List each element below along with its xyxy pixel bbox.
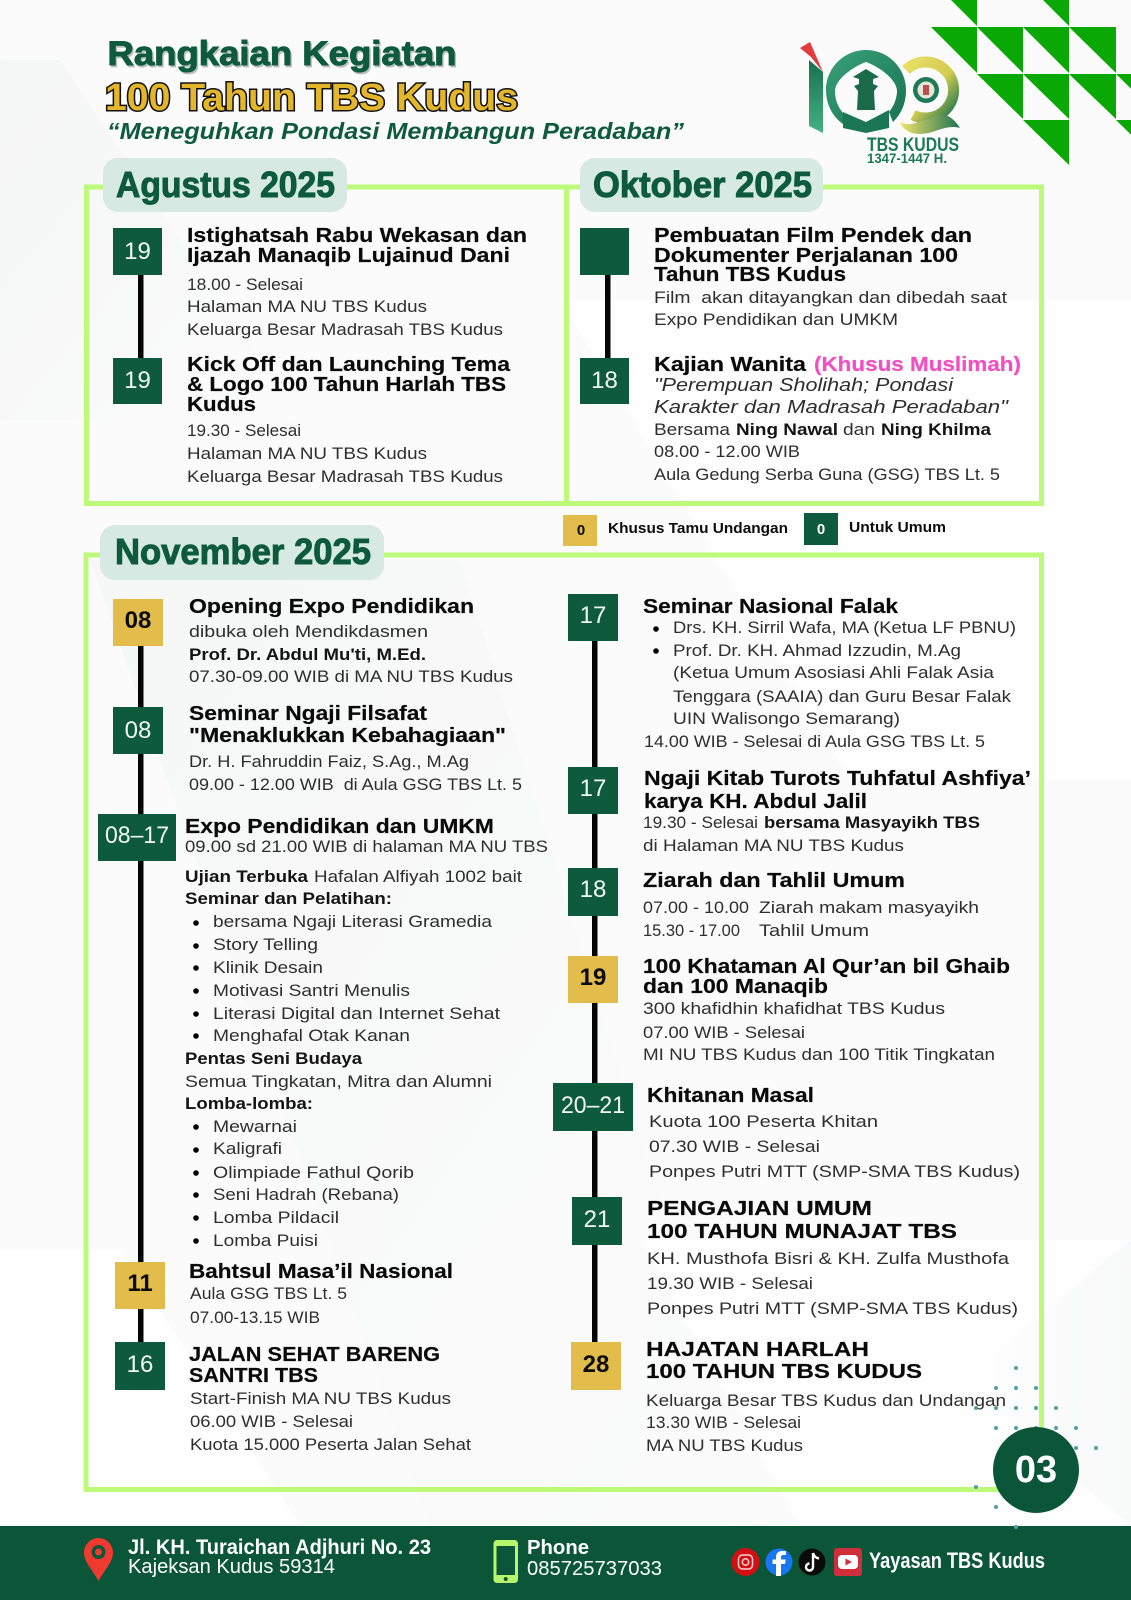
legend: invitation only: Khusus Tamu Undangan	[608, 521, 788, 537]
panel frame	[566, 187, 1042, 504]
event: Bahtsul Masa'il: 07.00-13.15 WIB	[190, 1308, 320, 1327]
event: Expo Pendidikan dan UMKM: Hafalan Alfiyah 1002 bait	[314, 867, 522, 886]
event: Hajatan Harlah: 100 TAHUN TBS KUDUS	[646, 1360, 922, 1383]
date box 21: 21	[584, 1206, 610, 1233]
event: Kajian Wanita: Aula Gedung Serba Guna (GSG) TBS Lt. 5	[654, 465, 1000, 484]
month pill: Oktober 2025	[593, 164, 812, 205]
timeline line	[138, 275, 144, 358]
event: Kajian Wanita: "Perempuan Sholihah; Pondasi	[654, 375, 954, 395]
legend: invitation only: 0	[577, 522, 585, 539]
event: Pembuatan Film: Expo Pendidikan dan UMKM	[654, 310, 898, 329]
event: Seminar Nasional Falak	[643, 595, 1016, 751]
date box 19 second: 19	[124, 367, 151, 394]
logo arch	[826, 50, 906, 124]
event: Seminar Ngaji Filsafat: "Menaklukkan Kebahagiaan"	[189, 724, 506, 747]
date box 18	[580, 358, 629, 404]
tagline: “Meneguhkan Pondasi Membangun Peradaban”	[107, 118, 685, 144]
title block	[105, 35, 685, 144]
date box 28	[571, 1342, 621, 1390]
event: Istighatsah: Ijazah Manaqib Lujainud Dani	[187, 244, 510, 267]
date box 18: 18	[580, 876, 606, 903]
event: Jalan Sehat: SANTRI TBS	[189, 1364, 318, 1387]
footer bar	[0, 1526, 1131, 1600]
event: Khataman: 300 khafidhin khafidhat TBS Kudus	[643, 999, 945, 1018]
event: Kick Off: Keluarga Besar Madrasah TBS Kudus	[187, 467, 503, 486]
event: Expo Pendidikan dan UMKM: Seminar dan Pelatihan:	[185, 889, 392, 908]
logo gold ring	[906, 62, 954, 118]
logo book	[843, 110, 889, 133]
list: lomba: Lomba Puisi	[213, 1231, 318, 1250]
event: Ngaji Kitab	[643, 767, 1031, 855]
event: Hajatan Harlah: Keluarga Besar TBS Kudus dan Undangan	[646, 1391, 1006, 1410]
event: Expo Pendidikan dan UMKM: Ujian Terbuka	[185, 867, 309, 886]
event: Khataman: 07.00 WIB - Selesai	[643, 1023, 805, 1042]
date box 19: 19	[124, 238, 151, 265]
footer phone: 085725737033	[527, 1558, 662, 1580]
date box 19	[113, 228, 162, 275]
event: Opening Expo	[189, 595, 513, 686]
list: lomba: Seni Hadrah (Rebana)	[213, 1185, 399, 1204]
legend: public: 0	[817, 521, 825, 538]
event: Kajian Wanita: Kajian Wanita	[654, 353, 807, 376]
footer address	[84, 1536, 431, 1581]
event: Ngaji Kitab: Ngaji Kitab Turots Tuhfatul Ashfiya’	[644, 767, 1031, 790]
list: seminar: Klinik Desain	[213, 958, 323, 977]
date box 28: 28	[583, 1351, 609, 1378]
date box 21	[572, 1197, 622, 1245]
event: Kick Off: Kudus	[187, 393, 256, 416]
event: Seminar Nasional Falak: Drs. KH. Sirril Wafa, MA (Ketua LF PBNU)	[673, 618, 1016, 637]
event: Bahtsul Masa'il: Aula GSG TBS Lt. 5	[190, 1284, 347, 1303]
month pill: November 2025	[115, 531, 371, 572]
event: Kajian Wanita	[654, 353, 1021, 484]
event: Ngaji Kitab: bersama Masyayikh TBS	[764, 813, 980, 832]
heading: Rangkaian Kegiatan: Rangkaian Kegiatan	[108, 35, 457, 73]
event: Kajian Wanita: (Khusus Muslimah)	[814, 353, 1021, 376]
list: lomba: Lomba Pildacil	[213, 1208, 339, 1227]
event: Bahtsul Masa'il	[189, 1260, 453, 1327]
event: Khitanan Masal: Khitanan Masal	[647, 1084, 814, 1107]
event: Pengajian Umum: KH. Musthofa Bisri & KH. Zulfa Musthofa	[647, 1249, 1010, 1268]
left timeline line	[138, 646, 144, 1342]
event: Pengajian Umum: Ponpes Putri MTT (SMP-SMA TBS Kudus)	[647, 1299, 1018, 1318]
logo numeral one	[809, 60, 823, 133]
list: seminar	[193, 912, 500, 1045]
event: Hajatan Harlah: MA NU TBS Kudus	[646, 1436, 803, 1455]
logo tower	[853, 69, 879, 110]
event: Expo Pendidikan dan UMKM: Pentas Seni Budaya	[185, 1049, 363, 1068]
legend	[563, 513, 946, 546]
event: Pengajian Umum: 19.30 WIB - Selesai	[647, 1274, 813, 1293]
event: Jalan Sehat: JALAN SEHAT BARENG	[189, 1343, 440, 1366]
event: Pembuatan Film: Film akan ditayangkan dan dibedah saat	[654, 288, 1007, 307]
event: Jalan Sehat: 06.00 WIB - Selesai	[190, 1412, 353, 1431]
event: Hajatan Harlah: 13.30 WIB - Selesai	[646, 1413, 801, 1432]
logo emblem	[913, 77, 939, 103]
footer phone	[494, 1537, 662, 1583]
event: Istighatsah: Istighatsah Rabu Wekasan dan	[187, 224, 527, 247]
heading: Rangkaian Kegiatan: Rangkaian Kegiatan	[109, 37, 458, 75]
date box 19 gold: 19	[580, 964, 606, 991]
event: Khataman	[643, 955, 1010, 1064]
event: Bahtsul Masa'il: Bahtsul Masa’il Nasional	[189, 1260, 453, 1283]
month pill	[100, 525, 384, 580]
event: Hajatan Harlah	[646, 1338, 1006, 1455]
logo swoosh	[900, 115, 960, 134]
date box 16	[115, 1342, 165, 1390]
right timeline line	[592, 641, 598, 1342]
event: Istighatsah: Halaman MA NU TBS Kudus	[187, 297, 427, 316]
event: Seminar Nasional Falak: Tenggara (SAAIA) dan Guru Besar Falak	[673, 687, 1012, 706]
event: Pembuatan Film: Tahun TBS Kudus	[654, 263, 846, 286]
event: Kick Off: & Logo 100 Tahun Harlah TBS	[187, 373, 506, 396]
date box 17: 17	[580, 602, 606, 629]
event: Opening Expo: 07.30-09.00 WIB di MA NU TBS Kudus	[189, 667, 513, 686]
event: Expo Pendidikan dan UMKM: Expo Pendidikan dan UMKM	[185, 815, 494, 838]
event: Pengajian Umum	[647, 1197, 1018, 1318]
footer phone: Phone	[527, 1537, 589, 1559]
heading: 100 Tahun TBS Kudus: 100 Tahun TBS Kudus	[105, 77, 518, 119]
event: Pengajian Umum: 100 TAHUN MUNAJAT TBS	[647, 1220, 957, 1243]
logo wordmark: TBS KUDUS	[867, 135, 959, 156]
panel frame	[86, 187, 566, 504]
event: Seminar Ngaji Filsafat: Dr. H. Fahruddin Faiz, S.Ag., M.Ag	[189, 752, 469, 771]
event: Kick Off	[187, 353, 511, 486]
event: Khataman: 100 Khataman Al Qur’an bil Ghaib	[643, 955, 1010, 978]
panel: November 2025	[86, 525, 1042, 1490]
event: Opening Expo: dibuka oleh Mendikdasmen	[189, 622, 428, 641]
footer social: Yayasan TBS Kudus	[869, 1548, 1045, 1573]
logo years: 1347-1447 H.	[867, 151, 947, 166]
event: Khataman: MI NU TBS Kudus dan 100 Titik Tingkatan	[643, 1045, 995, 1064]
legend: public	[804, 513, 946, 545]
timeline line	[605, 275, 610, 358]
event: Ziarah: Ziarah makam masyayikh	[759, 898, 979, 917]
event: Ngaji Kitab: 19.30 - Selesai	[643, 813, 758, 832]
date box 08 gold: 08	[125, 607, 151, 634]
event: Pembuatan Film: Dokumenter Perjalanan 100	[654, 244, 958, 267]
icon: youtube	[834, 1548, 862, 1576]
list: lomba: Kaligrafi	[213, 1139, 282, 1158]
event: Kajian Wanita: Bersama	[654, 420, 731, 439]
list: seminar: Motivasi Santri Menulis	[213, 981, 410, 1000]
event: Istighatsah: 18.00 - Selesai	[187, 275, 303, 294]
date box 19 second	[113, 358, 162, 404]
event: Expo Pendidikan dan UMKM: Lomba-lomba:	[185, 1094, 313, 1113]
event: Expo Pendidikan dan UMKM	[185, 815, 548, 1250]
list: lomba: Mewarnai	[213, 1117, 297, 1136]
event: Seminar Nasional Falak: Seminar Nasional Falak	[643, 595, 899, 618]
event: Seminar Nasional Falak: Prof. Dr. KH. Ahmad Izzudin, M.Ag	[673, 641, 961, 660]
event: Kajian Wanita: 08.00 - 12.00 WIB	[654, 442, 800, 461]
date box 18	[568, 868, 618, 916]
event: Istighatsah: Keluarga Besar Madrasah TBS Kudus	[187, 320, 503, 339]
page number badge: 03	[1015, 1449, 1057, 1491]
event: Ziarah: 15.30 - 17.00	[643, 921, 740, 940]
panel frame	[86, 555, 1042, 1490]
page number badge	[993, 1427, 1079, 1513]
list: lomba: Olimpiade Fathul Qorib	[213, 1163, 414, 1182]
date box 17 second: 17	[580, 775, 606, 802]
event: Khitanan Masal: Ponpes Putri MTT (SMP-SMA TBS Kudus)	[649, 1162, 1020, 1181]
event: Jalan Sehat: Kuota 15.000 Peserta Jalan Sehat	[190, 1435, 471, 1454]
event: Kajian Wanita: dan	[843, 420, 875, 439]
list: seminar: Menghafal Otak Kanan	[213, 1026, 410, 1045]
date box 08 gold	[113, 599, 163, 646]
footer social	[732, 1548, 1045, 1576]
event: Seminar Nasional Falak: UIN Walisongo Semarang)	[673, 709, 900, 728]
event: Opening Expo: Opening Expo Pendidikan	[189, 595, 474, 618]
event: Seminar Ngaji Filsafat: Seminar Ngaji Filsafat	[189, 702, 427, 725]
event: Kick Off: Kick Off dan Launching Tema	[187, 353, 511, 376]
event: Pembuatan Film: Pembuatan Film Pendek dan	[654, 224, 972, 247]
event: Pembuatan Film	[654, 224, 1007, 329]
date box 17 second	[568, 767, 618, 814]
date box 08 green: 08	[125, 717, 151, 744]
event: Ziarah: 07.00 - 10.00	[643, 898, 749, 917]
date box 11	[115, 1262, 165, 1309]
event: Seminar Ngaji Filsafat: 09.00 - 12.00 WIB di Aula GSG TBS Lt. 5	[189, 775, 522, 794]
event: Hajatan Harlah: HAJATAN HARLAH	[646, 1338, 869, 1361]
footer address: Jl. KH. Turaichan Adjhuri No. 23	[128, 1536, 431, 1559]
icon: instagram	[732, 1548, 760, 1576]
date box 16: 16	[127, 1351, 153, 1378]
icon: phone	[494, 1540, 518, 1583]
event: Kick Off: Halaman MA NU TBS Kudus	[187, 444, 427, 463]
event: Expo Pendidikan dan UMKM: 09.00 sd 21.00 WIB di halaman MA NU TBS	[185, 837, 548, 856]
event: Khitanan Masal: Kuota 100 Peserta Khitan	[649, 1112, 878, 1131]
list: lomba	[193, 1117, 414, 1250]
event: Seminar Ngaji Filsafat	[189, 702, 522, 794]
date box 08 green	[113, 707, 163, 754]
decorative dot grid	[974, 1366, 1098, 1529]
date box 11: 11	[127, 1270, 153, 1297]
event: Ngaji Kitab: karya KH. Abdul Jalil	[644, 790, 867, 813]
date box 20-21	[553, 1083, 633, 1131]
list: seminar: bersama Ngaji Literasi Gramedia	[213, 912, 493, 931]
date box 08-17	[98, 814, 176, 861]
date box 19 gold	[568, 956, 618, 1003]
icon: facebook	[766, 1548, 792, 1576]
legend: public: Untuk Umum	[849, 520, 946, 536]
event: Ziarah: Tahlil Umum	[759, 921, 869, 940]
event: Jalan Sehat	[189, 1343, 471, 1454]
list: seminar: Story Telling	[213, 935, 318, 954]
date box 18: 18	[591, 367, 618, 394]
event: Kajian Wanita: Ning Nawal	[736, 420, 838, 439]
footer address: Kajeksan Kudus 59314	[128, 1556, 335, 1578]
date box 17	[568, 594, 618, 641]
event: Kajian Wanita: Ning Khilma	[881, 420, 992, 439]
event: Ziarah	[643, 869, 979, 940]
event: Kick Off: 19.30 - Selesai	[187, 421, 301, 440]
event: Kajian Wanita: Karakter dan Madrasah Peradaban"	[654, 397, 1010, 417]
list: seminar: Literasi Digital dan Internet Sehat	[213, 1004, 500, 1023]
event: Khitanan Masal	[647, 1084, 1020, 1181]
event: Jalan Sehat: Start-Finish MA NU TBS Kudus	[190, 1389, 451, 1408]
panel: Agustus 2025	[86, 158, 566, 504]
icon: location pin	[84, 1538, 113, 1581]
blank date box	[580, 228, 629, 275]
event: Istighatsah	[187, 224, 527, 339]
month pill: Agustus 2025	[116, 164, 335, 205]
icon: tiktok	[798, 1548, 826, 1576]
event: Opening Expo: Prof. Dr. Abdul Mu'ti, M.Ed.	[189, 645, 426, 664]
event: Khitanan Masal: 07.30 WIB - Selesai	[649, 1137, 820, 1156]
date box 20-21: 20–21	[561, 1092, 625, 1119]
legend: invitation only	[563, 515, 788, 546]
date box 08-17: 08–17	[105, 822, 169, 849]
event: Khataman: dan 100 Manaqib	[643, 975, 828, 998]
panel: Oktober 2025	[566, 158, 1042, 504]
logo: 100 Tahun TBS Kudus	[800, 42, 960, 166]
event: Ziarah: Ziarah dan Tahlil Umum	[643, 869, 905, 892]
event: Seminar Nasional Falak: 14.00 WIB - Selesai di Aula GSG TBS Lt. 5	[644, 732, 985, 751]
decorative triangle pattern: top right	[931, 0, 1131, 165]
event: Seminar Nasional Falak: (Ketua Umum Asosiasi Ahli Falak Asia	[673, 663, 995, 682]
event: Ngaji Kitab: di Halaman MA NU TBS Kudus	[643, 836, 904, 855]
event: Expo Pendidikan dan UMKM: Semua Tingkatan, Mitra dan Alumni	[185, 1072, 492, 1091]
event: Pengajian Umum: PENGAJIAN UMUM	[647, 1197, 872, 1220]
